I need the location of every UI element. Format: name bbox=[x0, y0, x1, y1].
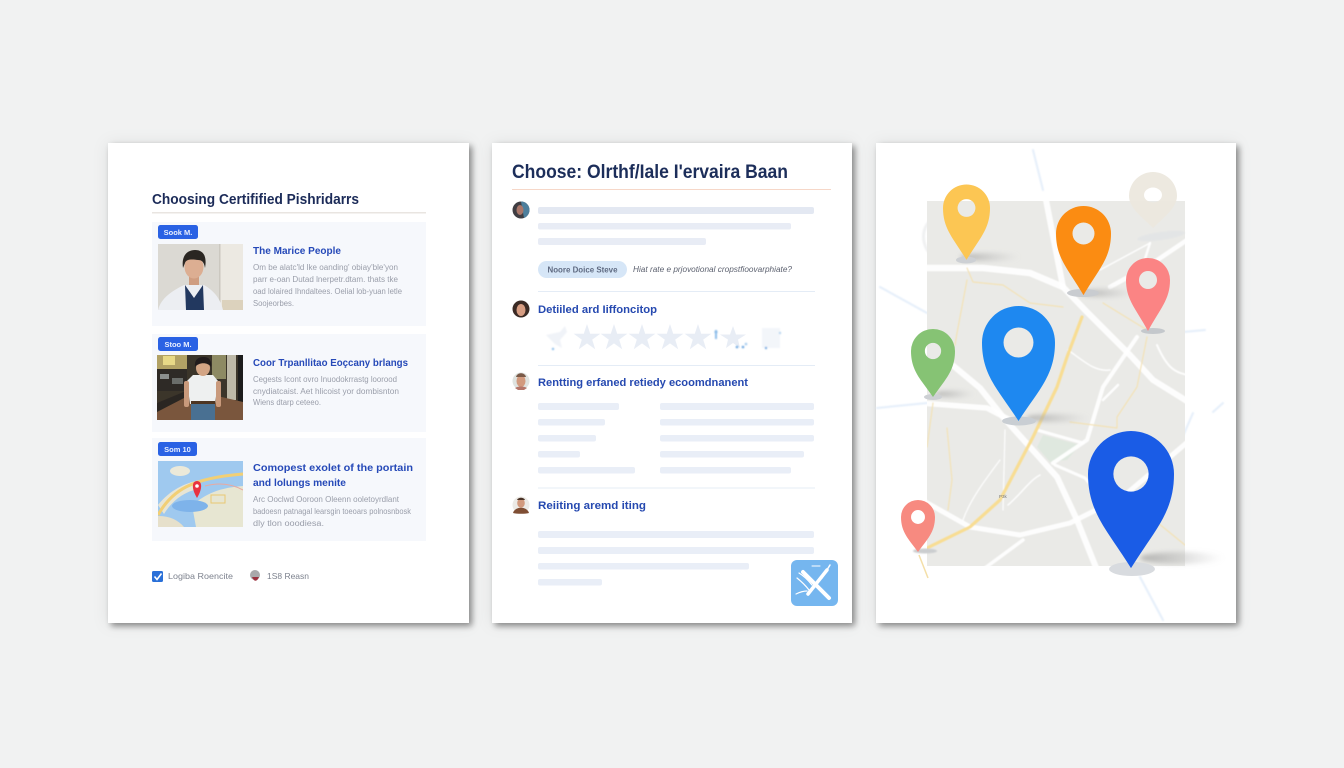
section 4 bbox=[512, 496, 814, 586]
avatar 1 bbox=[512, 202, 530, 218]
heading: choosing certified: Choosing Certifified Pishridarrs bbox=[152, 192, 359, 208]
avatar 4 bbox=[512, 496, 530, 514]
footer: checkbox label: Logiba Roencite bbox=[168, 571, 233, 581]
section 4 title: Reiiting aremd iting bbox=[538, 500, 646, 512]
photo: map with red pin bbox=[158, 461, 243, 527]
pill: Noore Doice Steve bbox=[548, 266, 618, 274]
body text 3: Arc Ooclwd Ooroon Oleenn ooletoyrdlant bbox=[253, 495, 400, 504]
body text 2 bbox=[253, 375, 399, 407]
footer: checkbox label bbox=[152, 571, 233, 582]
body text 3: badoesn patnagal learsgin toeoars polnosnbosk bbox=[253, 507, 412, 516]
heading: choose: Choose: Olrthf/Iale I'ervaira Baan bbox=[512, 162, 788, 183]
pin: large deep blue bbox=[1088, 431, 1224, 576]
body text 1: oad lolaired Ihndaltees. Oelial lob-yuan letle bbox=[253, 287, 403, 296]
body text 1: Soojeorbes. bbox=[253, 299, 294, 308]
title 3: Comopest exolet of the portain bbox=[253, 462, 413, 474]
pin: blue bbox=[982, 306, 1090, 426]
park bbox=[1038, 436, 1076, 462]
body text 1 bbox=[253, 263, 403, 308]
icon: crossed tools badge bbox=[791, 560, 838, 606]
avatar 3 bbox=[512, 372, 530, 390]
badge 1 bbox=[158, 225, 198, 239]
section 3 bbox=[512, 372, 814, 474]
yellow roads bbox=[923, 268, 1185, 550]
faint outer streets bbox=[877, 150, 1223, 620]
pin: yellow bbox=[943, 184, 1020, 264]
panel: certified professionals list bbox=[108, 143, 469, 623]
panel: map with location pins bbox=[876, 143, 1236, 623]
body text 1: Om be alatc'ld lke oanding' obiay'ble'yon bbox=[253, 263, 398, 272]
photo: person in workshop bbox=[157, 355, 243, 420]
photo: professional in white coat bbox=[158, 244, 243, 310]
section 3 title: Rentting erfaned retiedy ecoomdnanent bbox=[538, 377, 748, 389]
map base bbox=[920, 195, 1190, 570]
body text 3: dly tlon ooodiesa. bbox=[253, 519, 324, 528]
section 2 title: Detiiled ard Iiffoncitop bbox=[538, 304, 657, 316]
title 1: The Marice People bbox=[253, 245, 341, 257]
footer: resource label bbox=[250, 570, 309, 581]
placeholder table bbox=[538, 403, 814, 474]
section 2 bbox=[512, 300, 781, 350]
white roads bbox=[920, 195, 1190, 570]
section 1 bbox=[512, 202, 814, 278]
body text 1: parr e-oan Dutad lnerpetr.dtam. thats tke bbox=[253, 275, 399, 284]
placeholder text lines bbox=[538, 207, 814, 245]
title 2: Coor Trpanllitao Eoçcany brlangs bbox=[253, 357, 408, 369]
pin: green bbox=[911, 329, 975, 400]
pin: pink bbox=[1126, 258, 1170, 334]
road tail bbox=[919, 555, 928, 578]
star rating bbox=[546, 324, 781, 350]
avatar 2 bbox=[512, 300, 530, 318]
pin: orange bbox=[1056, 206, 1136, 297]
card 3 bbox=[152, 438, 426, 541]
card 1 bbox=[152, 222, 426, 326]
badge 3 bbox=[158, 442, 197, 456]
badge 3: Som 10 bbox=[164, 445, 191, 454]
body text 3 bbox=[253, 495, 412, 528]
body text 2: Cegests Icont ovro Inuodokrrastg loorood bbox=[253, 375, 397, 384]
card 2 bbox=[152, 334, 426, 432]
placeholder lines bbox=[538, 531, 814, 586]
card 3: and lolungs menite bbox=[253, 477, 346, 489]
body text 2: Wiens dtarp ceteeo. bbox=[253, 398, 321, 407]
pin: small coral bbox=[901, 500, 937, 554]
panel: choosing guidance bbox=[492, 143, 852, 623]
badge 2: Stoo M. bbox=[164, 340, 192, 349]
badge 1: Sook M. bbox=[164, 228, 192, 237]
badge 2 bbox=[158, 337, 198, 351]
pill bbox=[538, 261, 627, 278]
question text: Hiat rate e prjovotional cropstfioovarphiate? bbox=[633, 265, 793, 274]
road label: P3k bbox=[999, 494, 1008, 499]
body text 2: cnydiatcaist. Aet hlicoist yor dombisnton bbox=[253, 387, 399, 396]
footer: resource label: 1S8 Reasn bbox=[267, 571, 309, 581]
pin: pale beige bbox=[1129, 172, 1185, 243]
